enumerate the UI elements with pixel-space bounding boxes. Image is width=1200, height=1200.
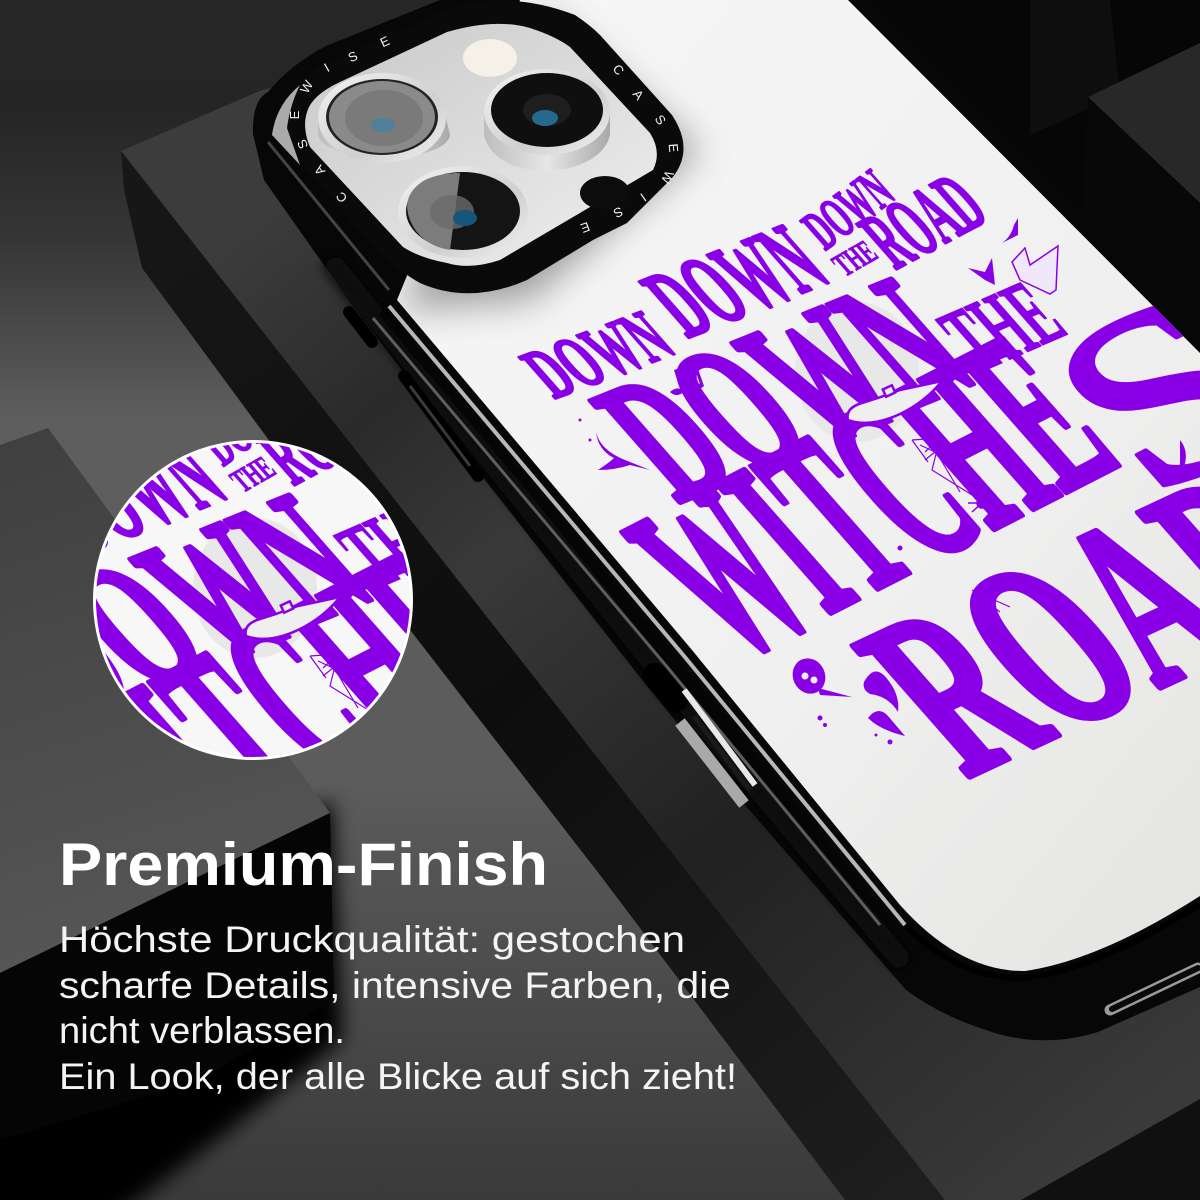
icon: ghost one (864, 671, 898, 712)
lower left dark face (0, 800, 342, 1200)
island shadow (400, 10, 700, 310)
camera island (272, 0, 684, 293)
zoom detail circle: DOWN (188, 374, 304, 477)
body text: Ein Look, der alle Blicke auf sich zieht! (59, 1056, 737, 1097)
printed lettering: THE (825, 234, 885, 283)
branding letters on camera ring, left: A (311, 162, 328, 178)
body text: scharfe Details, intensive Farben, die (59, 965, 731, 1006)
web in O (972, 580, 1010, 622)
body text (59, 919, 737, 1097)
background block: upper right (1080, 43, 1200, 345)
lens: upper left (318, 73, 450, 163)
zoom detail circle: ROAD (239, 373, 403, 501)
printed lettering: DOWN (505, 297, 691, 413)
branding letters on camera ring, left: E (378, 33, 392, 50)
printed lettering: DOWN (621, 206, 850, 357)
icon: branch (596, 432, 650, 470)
background: upper right panel (1030, 0, 1120, 135)
hat silhouette (795, 302, 919, 442)
branding letters on camera ring, left: S (294, 137, 311, 151)
branding letters on camera ring, right: E (666, 143, 681, 153)
icon: skull ghost (787, 653, 852, 699)
printed lettering (505, 157, 1200, 822)
branding letters on camera ring, right: W (658, 168, 677, 187)
witch hat brim (848, 381, 942, 423)
branding letters on camera ring, right: I (638, 190, 649, 205)
flash (463, 39, 517, 77)
branding letters on camera ring, right (578, 61, 681, 236)
printed lettering: ROAD (841, 157, 1005, 285)
button: recess (655, 675, 676, 700)
case reflection sliver (272, 85, 300, 165)
button: small side (349, 312, 372, 342)
infographic canvas: WITCHE (0, 504, 560, 921)
island glass (305, 24, 657, 266)
splatter (578, 418, 907, 744)
branding letters on camera ring, right: S (652, 112, 669, 128)
lens: upper right (484, 69, 610, 171)
body text: Höchste Druckqualität: gestochen (59, 919, 685, 960)
branding letters on camera ring, left: W (297, 77, 316, 96)
icon: outlined bat (1012, 246, 1058, 294)
printed lettering: THE (918, 262, 1085, 389)
left block front face (0, 813, 334, 1140)
heading: Premium-Finish (59, 831, 548, 898)
branding letters on camera ring, left: I (321, 60, 332, 75)
branding letters on camera ring, right: A (630, 87, 647, 103)
icon: bat lower (968, 258, 995, 285)
branding letters on camera ring, right: E (578, 219, 592, 236)
body text: nicht verblassen. (59, 1010, 345, 1051)
island outer ring (283, 0, 684, 293)
frame inner band (330, 260, 905, 965)
icon: ghost two (868, 711, 905, 736)
spider web (912, 438, 980, 500)
zoom detail circle (93, 440, 413, 760)
frame highlights (268, 142, 1200, 978)
decorations: note, bats, branches, ghosts (578, 218, 1186, 744)
button: silver side control (680, 690, 755, 804)
branding letters on camera ring, left: E (287, 110, 302, 119)
white phone back (397, 0, 1200, 971)
button highlight (410, 386, 470, 466)
background: dark upper right (700, 0, 1200, 520)
hat silhouette detail (193, 518, 317, 658)
charging port (1110, 968, 1198, 1010)
lidar sensor (580, 176, 630, 210)
branding letters on camera ring, right: S (611, 204, 625, 221)
hat brim detail (246, 597, 340, 639)
branding letters on camera ring, right: C (610, 61, 627, 78)
icon: bat upper (998, 218, 1018, 245)
spider (968, 494, 996, 512)
button: volume (404, 376, 478, 476)
phone case frame (253, 0, 1200, 1040)
icon: music note (670, 363, 704, 395)
web detail (310, 654, 367, 710)
left foreground block (0, 428, 330, 973)
branding letters on camera ring, left: C (333, 189, 350, 206)
zoom detail circle: THE (316, 478, 483, 605)
printed lettering: DOWN (790, 158, 906, 261)
lens: bottom (398, 166, 528, 258)
branding letters on camera ring, left: S (346, 48, 360, 65)
zoom detail circle: THE (223, 450, 283, 499)
icon: tree branch right (1178, 440, 1186, 485)
branding letters on camera ring, left (287, 33, 392, 206)
zoom detail circle: DOWN (19, 422, 248, 573)
phone (253, 0, 1200, 1040)
